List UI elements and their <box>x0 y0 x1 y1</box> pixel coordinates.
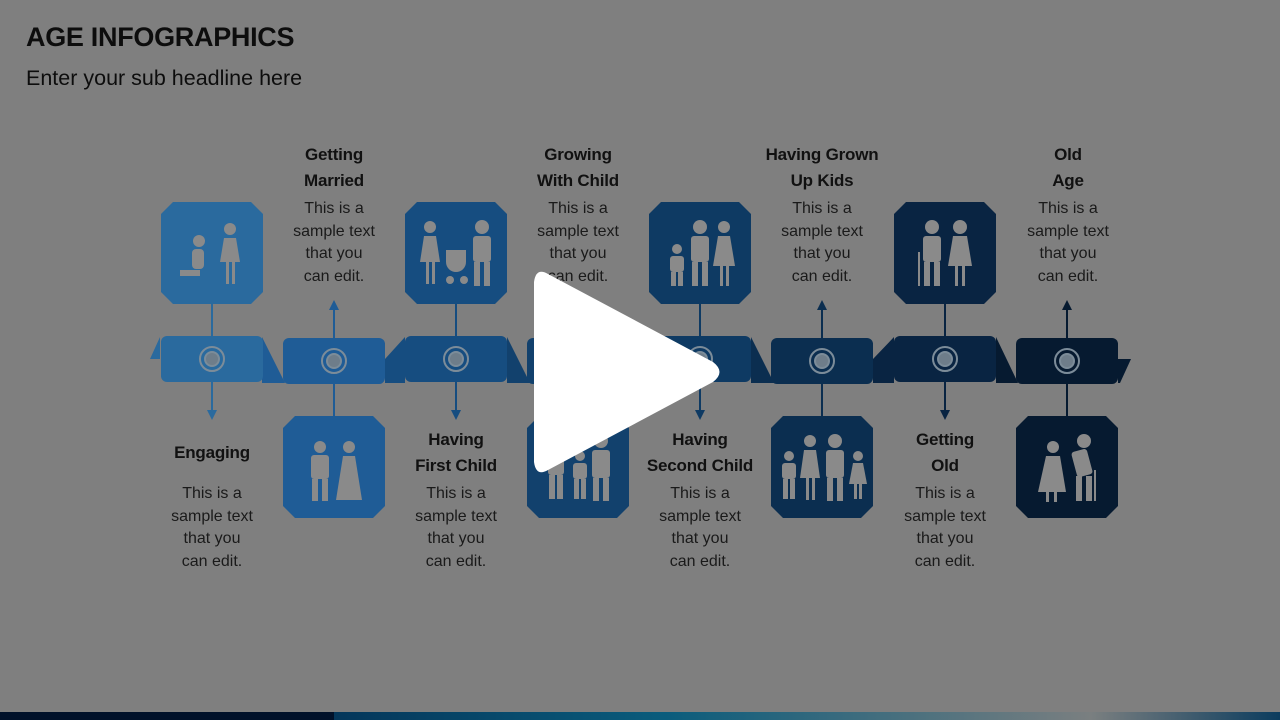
subtitle: Enter your sub headline here <box>26 66 302 90</box>
text: Having Grown Up Kids: sample text <box>781 223 863 240</box>
text: Getting Married: can edit. <box>304 268 364 285</box>
text: Having First Child: sample text <box>415 508 497 525</box>
text: Growing With Child: sample text <box>537 223 619 240</box>
icons: people figures <box>180 220 1096 502</box>
band boxes <box>161 336 1118 384</box>
text: Old Age: can edit. <box>1038 268 1098 285</box>
text: Getting Married <box>293 200 375 285</box>
icon: play button <box>534 272 720 472</box>
text: Growing With Child: This is a <box>548 200 608 217</box>
text: Having Grown Up Kids: This is a <box>792 200 852 217</box>
label: Getting Married: Married <box>304 171 364 190</box>
label: Having Grown Up Kids: Having Grown <box>766 145 878 164</box>
text: Engaging: This is a <box>182 485 242 502</box>
label: Growing With Child: With Child <box>537 171 619 190</box>
text: Getting Married: This is a <box>304 200 364 217</box>
text: Engaging: sample text <box>171 508 253 525</box>
connectors <box>212 304 1067 416</box>
text: Having Second Child: This is a <box>670 485 730 502</box>
label: Old Age <box>1052 145 1084 190</box>
text: Getting Old <box>904 485 986 570</box>
bottom bar <box>0 712 1280 720</box>
label: Having First Child: First Child <box>415 456 497 475</box>
label: Having First Child: Having <box>428 430 484 449</box>
label: Growing With Child: Growing <box>544 145 612 164</box>
text: Getting Old: sample text <box>904 508 986 525</box>
text: Old Age: This is a <box>1038 200 1098 217</box>
text: Growing With Child <box>537 200 619 285</box>
text: Growing With Child: can edit. <box>548 268 608 285</box>
text: Having Second Child <box>659 485 741 570</box>
label: Old Age: Age <box>1052 171 1084 190</box>
text: Having Second Child: can edit. <box>670 553 730 570</box>
text: Getting Old: can edit. <box>915 553 975 570</box>
ribbon band <box>150 337 1131 383</box>
text: Growing With Child: that you <box>550 245 606 262</box>
label: Engaging: Engaging <box>174 443 250 462</box>
text: Getting Married: sample text <box>293 223 375 240</box>
text: Engaging: that you <box>184 530 240 547</box>
label: Having Second Child: Second Child <box>647 456 753 475</box>
text: Old Age: sample text <box>1027 223 1109 240</box>
text: Having Second Child: that you <box>672 530 728 547</box>
text: Having Grown Up Kids: can edit. <box>792 268 852 285</box>
text: Old Age: that you <box>1040 245 1096 262</box>
label: Getting Old <box>916 430 974 475</box>
label: Getting Old: Old <box>931 456 959 475</box>
text: Having Second Child: sample text <box>659 508 741 525</box>
text: Having First Child: This is a <box>426 485 486 502</box>
icon boxes <box>161 202 1118 518</box>
text: Having First Child: can edit. <box>426 553 486 570</box>
label: Having Grown Up Kids <box>766 145 878 190</box>
text: Having First Child <box>415 485 497 570</box>
text: Engaging: can edit. <box>182 553 242 570</box>
text: Getting Old: This is a <box>915 485 975 502</box>
text: Having Grown Up Kids <box>781 200 863 285</box>
label: Getting Old: Getting <box>916 430 974 449</box>
label: Getting Married <box>304 145 364 190</box>
label: Having Grown Up Kids: Up Kids <box>791 171 853 190</box>
text: Getting Old: that you <box>917 530 973 547</box>
title: AGE INFOGRAPHICS <box>26 22 294 52</box>
label: Growing With Child <box>537 145 619 190</box>
label: Getting Married: Getting <box>305 145 363 164</box>
text: Engaging <box>171 485 253 570</box>
text: Old Age <box>1027 200 1109 285</box>
label: Having First Child <box>415 430 497 475</box>
label: Old Age: Old <box>1054 145 1082 164</box>
text: Having Grown Up Kids: that you <box>794 245 850 262</box>
text: Having First Child: that you <box>428 530 484 547</box>
label: Having Second Child <box>647 430 753 475</box>
text: Getting Married: that you <box>306 245 362 262</box>
label: Having Second Child: Having <box>672 430 728 449</box>
